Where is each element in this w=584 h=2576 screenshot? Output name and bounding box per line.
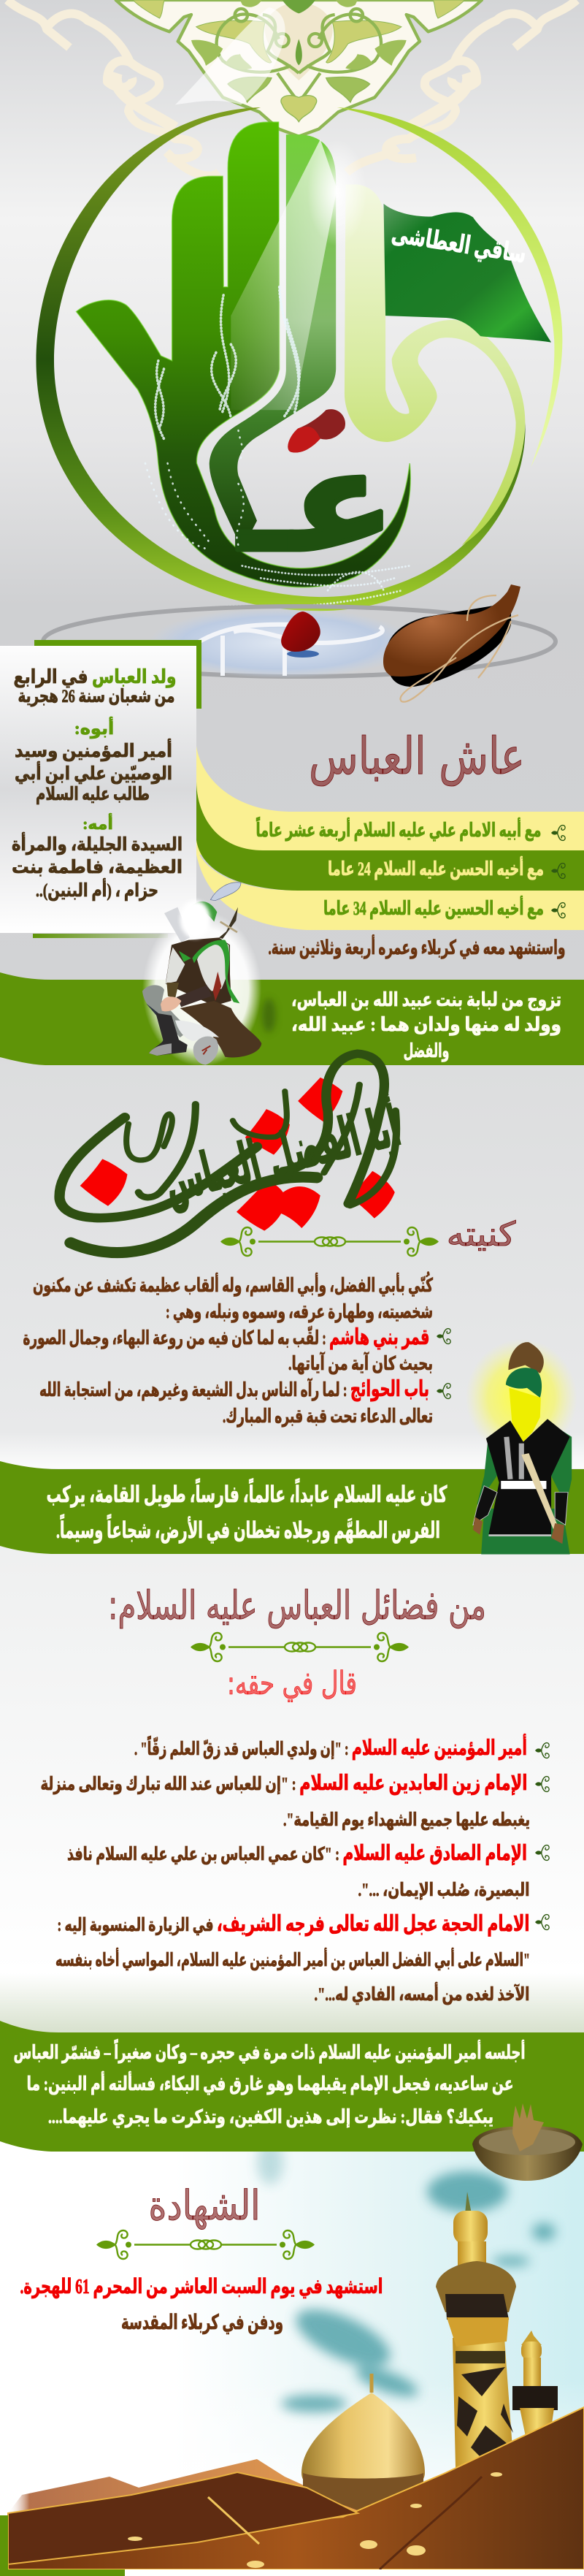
father text: أمير المؤمنين وسيد (15, 739, 172, 762)
header emblem section (7, 0, 577, 702)
red stone (281, 611, 320, 658)
marriage text (291, 989, 561, 1062)
figure: seated warrior (142, 883, 276, 1067)
clouds (257, 2141, 556, 2412)
divider ornament (191, 1633, 409, 1661)
tunic hem (488, 1533, 551, 1538)
band shape (0, 2021, 584, 2152)
forearm (177, 985, 212, 1007)
boot (149, 1013, 188, 1056)
figure: standing warrior (466, 1339, 577, 1554)
father text (15, 739, 172, 804)
pale legs (142, 985, 190, 1037)
mother text: السيدة الجليلة، والمرأة (12, 832, 182, 856)
sword (521, 1453, 558, 1529)
swashes (60, 1053, 396, 1253)
attributes text (47, 1478, 447, 1544)
quiver and arrows (164, 907, 190, 942)
calligraphy: Abu al-Fadl al-Abbas (60, 1053, 396, 1253)
panel body (0, 646, 196, 933)
belt (501, 1481, 546, 1489)
corner frame left (0, 2515, 8, 2576)
panel green backing (34, 640, 201, 709)
turban (190, 902, 217, 922)
hand emblem (77, 122, 525, 587)
front roof (8, 2407, 584, 2569)
bullet icons (551, 826, 565, 918)
hands (161, 997, 181, 1011)
top medallion ornament (116, 0, 482, 137)
red diamonds (80, 1078, 395, 1231)
divider ornament (220, 1227, 439, 1256)
text: kunya and titles: بحيث كان آية من آياتها. (288, 1352, 433, 1375)
sky fade (0, 2141, 584, 2576)
robe sleeves (166, 942, 229, 991)
mother text (12, 832, 182, 902)
fade above band (0, 1432, 584, 1468)
dome (301, 2374, 425, 2513)
panels inside medallion (265, 2, 333, 80)
light beams (231, 140, 367, 410)
text: kunya and titles: تعالى الدعاء تحت قبة قبره المبارك. (223, 1406, 433, 1428)
martyrdom section (0, 2141, 584, 2576)
yellow and green curved bands (196, 746, 584, 930)
arms (473, 1486, 568, 1525)
text: kunya and titles: شخصيته، وطهارة عرقه، وسموه ونبله، وهي : (166, 1301, 433, 1323)
panel: birth and parents (0, 640, 201, 938)
third finger and inner stroke (210, 134, 336, 549)
panel green foot (33, 934, 168, 938)
hand: thumb, two fingers and palm (77, 122, 410, 587)
text: kunya and titles: باب الحوائج : لما رآه الناس بدل الشيعة وغيرهم، من استجابة الله (39, 1377, 429, 1401)
torso (166, 937, 231, 1006)
water splash (145, 287, 410, 607)
marriage text: والفضل (403, 1040, 450, 1062)
white folds (175, 1021, 219, 1041)
figure glow (142, 911, 261, 1067)
sky background (0, 2141, 584, 2576)
plume (210, 883, 241, 901)
father text: طالب عليه السلام (36, 785, 150, 804)
childhood story band (0, 2021, 584, 2152)
corner frame bottom (0, 2569, 125, 2576)
section heading: he lived: عاش العباس (309, 726, 525, 786)
main minaret (436, 2192, 516, 2499)
bullet icons (437, 1329, 450, 1398)
footer white strip (125, 2569, 584, 2576)
sleeves (477, 1420, 572, 1505)
birth date: من شعبان سنة 26 هجرية (18, 687, 174, 707)
father heading: أبوه: (74, 717, 114, 739)
back dunes (8, 2459, 365, 2542)
quotes list (40, 1734, 530, 2005)
background arabesque (7, 0, 577, 176)
divider ornament (96, 2230, 315, 2259)
heading: martyrdom: الشهادة (149, 2182, 260, 2230)
quote continuation: البصيرة، صُلب الإيمان، ...". (358, 1880, 530, 1901)
list: years lived (256, 816, 565, 959)
halo (466, 1339, 577, 1457)
flag (384, 204, 551, 343)
sword (219, 907, 238, 939)
subheading: said about him: قال في حقه: (227, 1665, 357, 1702)
word ayn in palm: عـ (238, 421, 396, 582)
story text (13, 2038, 526, 2128)
martyrdom date: استشهد في يوم السبت العاشر من المحرم 61 للهجرة. (20, 2276, 383, 2298)
green scarf (179, 940, 239, 1003)
birth text: ولد العباس في الرابع (14, 666, 177, 688)
icon: bowl with hand (472, 2103, 583, 2181)
hands (473, 1517, 564, 1544)
mother heading: أمه: (82, 812, 113, 833)
band shape (0, 972, 584, 1065)
mother text: العظيمة، فاطمة بنت (12, 858, 182, 877)
red blood drop (288, 409, 345, 452)
wound (213, 972, 221, 1001)
band shape (0, 1461, 584, 1554)
text: kunya and titles: قمر بني هاشم : لقّب به لما كان فيه من روعة البهاء، وجمال الصورة (23, 1325, 429, 1350)
dark shadow right (262, 999, 276, 1032)
emblem rings (36, 107, 562, 611)
brown robe (180, 1001, 261, 1057)
father text: الوصيّين علي ابن أبي (15, 761, 172, 785)
heading: his kunya: كنيته (447, 1214, 516, 1254)
fourth finger and swoosh (345, 185, 525, 545)
veiled face (509, 1388, 541, 1441)
turban (506, 1368, 542, 1398)
lower robe (481, 1509, 570, 1554)
black tunic (486, 1419, 570, 1535)
bullet icons (535, 1743, 549, 1929)
reflecting pool (43, 606, 556, 678)
burial place: ودفن في كربلاء المقدسة (121, 2312, 283, 2334)
flag inscription: ساقي العطاشى (390, 221, 528, 269)
leather water skin (383, 584, 520, 702)
knee (193, 1036, 218, 1065)
veil glow (180, 900, 210, 938)
marriage band (0, 972, 584, 1065)
rear minaret (512, 2331, 558, 2444)
attributes band (0, 1461, 584, 1554)
plume (508, 1342, 544, 1373)
text: kunya and titles (23, 1272, 434, 1428)
middle roof (8, 2472, 358, 2564)
mother text: حزام ، (أم البنين).. (36, 878, 158, 902)
